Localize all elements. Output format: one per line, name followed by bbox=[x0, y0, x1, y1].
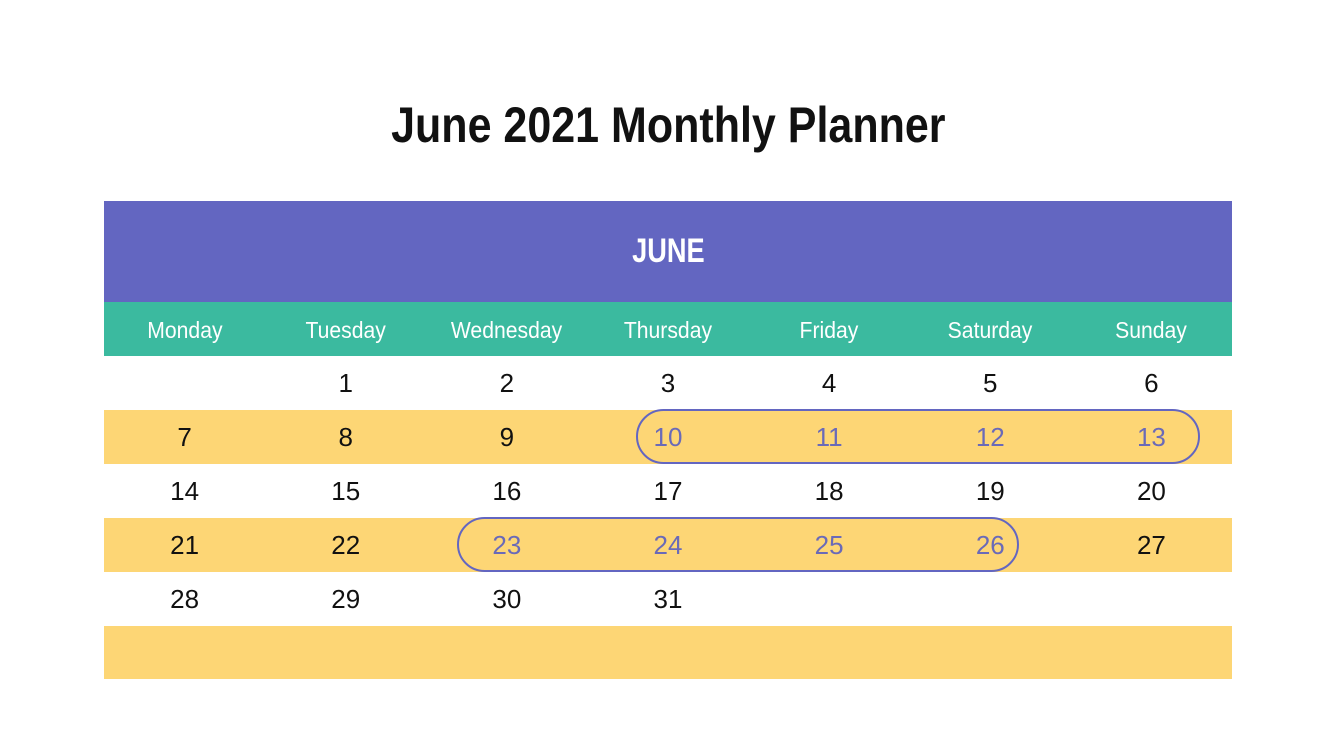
week 3: 19 bbox=[976, 476, 1005, 506]
week 4: 25 bbox=[815, 530, 844, 560]
week 1: 3 bbox=[661, 368, 675, 398]
week 2: 8 bbox=[338, 422, 353, 452]
weekday header bbox=[104, 302, 1232, 356]
week 2: 10 bbox=[654, 422, 682, 452]
highlight oval 23-26 bbox=[457, 517, 1019, 572]
week 2 bbox=[104, 410, 1232, 464]
week 2: 11 bbox=[816, 422, 843, 452]
week 1: 4 bbox=[822, 368, 836, 398]
week 5 bbox=[170, 584, 682, 614]
title: June 2021 Monthly Planner bbox=[391, 97, 945, 153]
week 1: 6 bbox=[1144, 368, 1159, 398]
week 5: 30 bbox=[492, 584, 521, 614]
week 3: 14 bbox=[170, 476, 199, 506]
week 3: 15 bbox=[331, 476, 360, 506]
weekday header: Tuesday bbox=[306, 317, 386, 343]
week 4: 26 bbox=[976, 530, 1005, 560]
weekday header: Saturday bbox=[948, 317, 1033, 343]
week 4: 27 bbox=[1137, 530, 1166, 560]
week 3: 20 bbox=[1137, 476, 1166, 506]
week 2: 9 bbox=[500, 422, 514, 452]
week 2: 12 bbox=[976, 422, 1005, 452]
weekday header: Sunday bbox=[1116, 317, 1187, 343]
week 3: 16 bbox=[492, 476, 521, 506]
highlight oval 10-13 bbox=[636, 409, 1200, 464]
month header: JUNE bbox=[632, 232, 704, 270]
weekday header: Wednesday bbox=[451, 317, 563, 343]
empty row bbox=[104, 626, 1232, 679]
week 1 bbox=[338, 368, 1159, 398]
week 4: 23 bbox=[492, 530, 521, 560]
week 5: 28 bbox=[170, 584, 199, 614]
week 3: 17 bbox=[654, 476, 682, 506]
week 4: 24 bbox=[654, 530, 682, 560]
week 2: 7 bbox=[177, 422, 192, 452]
week 3 bbox=[170, 476, 1166, 506]
week 1: 1 bbox=[338, 368, 353, 398]
weekday header: Monday bbox=[147, 317, 222, 343]
week 2: 13 bbox=[1137, 422, 1166, 452]
week 5: 29 bbox=[331, 584, 360, 614]
weekday header: Friday bbox=[800, 317, 859, 343]
month header bbox=[104, 201, 1232, 302]
week 4 bbox=[104, 518, 1232, 572]
week 1: 2 bbox=[500, 368, 514, 398]
week 4: 22 bbox=[331, 530, 360, 560]
week 4: 21 bbox=[170, 530, 199, 560]
week 3: 18 bbox=[815, 476, 844, 506]
weekday header: Thursday bbox=[624, 317, 712, 343]
week 1: 5 bbox=[983, 368, 998, 398]
week 5: 31 bbox=[654, 584, 682, 614]
